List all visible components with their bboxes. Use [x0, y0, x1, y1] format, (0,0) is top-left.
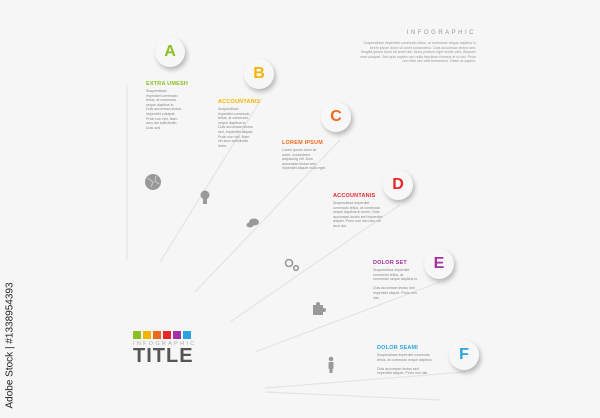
text: Suspendisse imperdiet commodo tellus, at commodo neque dapibus. — [377, 353, 433, 362]
text: Duis accumsan lectus sed imperdiet aliquet. Proin non nisi. — [373, 286, 417, 300]
step B — [244, 59, 274, 89]
title block — [133, 331, 196, 367]
text: DOLOR SEAMI — [377, 345, 418, 351]
top right block — [360, 30, 476, 63]
text: Suspendisse imperdiet commodo tellus, at commodo neque dapibus in. Duis accumsan lectus, imperdiet volutpat. Proin non nisi. Nam arcu dui sollicitudin. Duis sed. — [146, 89, 182, 130]
step A: A — [164, 43, 176, 60]
step C — [321, 102, 351, 132]
step D: D — [392, 176, 404, 193]
step E: E — [434, 255, 444, 272]
text: EXTRA UMESH — [146, 81, 188, 87]
icon: puzzle — [313, 302, 326, 315]
text: LOREM IPSUM — [282, 140, 323, 146]
icon: gears — [286, 260, 298, 270]
text: DOLOR SET — [373, 260, 407, 266]
step B: B — [253, 65, 265, 82]
text: Suspendisse imperdiet commodo tellus, at commodo neque dapibus in. Duis accumsan lectus sed, imperdiet aliquet. Proin non nisi. Nam vel arcu sollicitudin dolor. — [218, 107, 253, 148]
top right block: Suspendisse imperdiet commodo tellus, at commodo neque dapibus in lorem ipsum dolor sit amet consectetur. Duis accumsan lectus sed, fringilla ipsum dolor sit amet nisi. Nunc pretium eget mollis odio. Aliquam erat volutpat. Sed quis sapien nec nulla faucibus rhoncus et ut nisi. Proin non felis nec velit fermentum. Etiam at sapien. — [360, 41, 476, 63]
text: Suspendisse imperdiet commodo tellus, at commodo neque dapibus in. — [373, 268, 418, 281]
step D — [383, 170, 413, 200]
step E — [424, 249, 454, 279]
text: ACCOUNTANIS — [333, 193, 375, 199]
step F — [449, 340, 479, 370]
icon: bulb — [200, 190, 210, 204]
title block: INFOGRAPHIC — [133, 341, 196, 347]
step C: C — [330, 108, 342, 125]
title block: TITLE — [133, 345, 194, 367]
step F: F — [459, 346, 469, 363]
text: ACCOUNTANIS — [218, 99, 260, 105]
icon: globe — [145, 174, 161, 190]
text: Lorem ipsum dolor sit amet, consectetur adipiscing elit. Duis accumsan lectus sed, imperdiet aliquet nulla eget. — [282, 148, 326, 170]
icon: person — [328, 357, 334, 373]
watermark side text: Adobe Stock | #1338954393 — [4, 282, 16, 409]
step A — [155, 37, 185, 67]
text: Suspendisse imperdiet commodo tellus, at commodo neque dapibus in lorem. Duis accumsan lectus sed imperdiet aliquet. Proin non nisi nam vel arcu dui. — [333, 201, 382, 228]
text: Duis accumsan lectus sed imperdiet aliquet. Proin non nisi. — [377, 367, 428, 375]
top right block: INFOGRAPHIC — [407, 30, 476, 36]
icon: chat — [246, 218, 259, 228]
